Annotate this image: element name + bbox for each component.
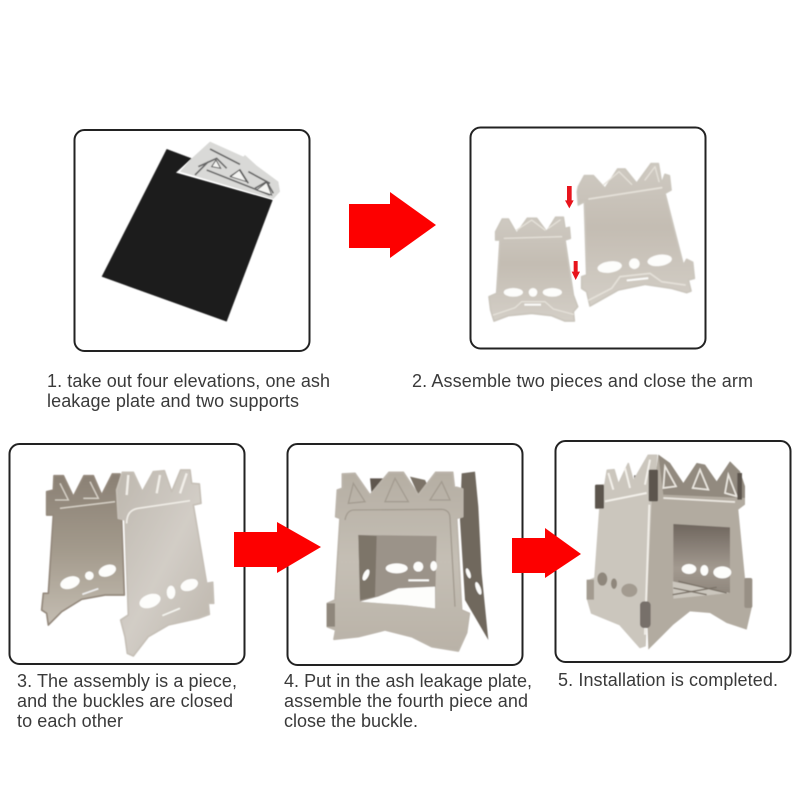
window with grate — [673, 524, 731, 599]
panel: step 5 — [556, 441, 790, 662]
embossed lines — [345, 478, 455, 607]
panel: step 1 — [74, 130, 310, 351]
hinge — [327, 603, 335, 627]
caption: step 4: assemble the fourth piece and — [284, 691, 528, 711]
left face — [587, 455, 657, 647]
arrow: step 4 to 5 — [512, 528, 581, 578]
caption: step 4: close the buckle. — [284, 711, 418, 731]
panel frame 5 — [556, 441, 790, 662]
caption: step 4: 4. Put in the ash leakage plate, — [284, 671, 532, 691]
red down arrow upper — [565, 186, 574, 208]
front frame plate — [327, 472, 469, 651]
caption: step 2: 2. Assemble two pieces and close the arm — [412, 371, 753, 391]
photo: partly assembled stove — [327, 472, 488, 651]
caption: step 4 — [284, 671, 532, 731]
arrow: step 1 to 2 — [349, 192, 436, 258]
caption: step 1: 1. take out four elevations, one ash — [47, 371, 330, 391]
caption: step 3: and the buckles are closed — [17, 691, 233, 711]
hinges — [587, 470, 752, 628]
large plate — [577, 164, 694, 306]
panel: step 4 — [288, 444, 522, 665]
front plate — [117, 470, 214, 656]
photo: black bag with plates — [102, 142, 280, 322]
back plate — [42, 474, 124, 625]
panel frame 2 — [470, 128, 706, 348]
red down arrow lower — [572, 261, 580, 280]
photo: two plates with arrows — [489, 164, 694, 321]
small plate — [489, 217, 578, 321]
panel frame 1 — [74, 130, 310, 351]
black bag — [102, 149, 273, 322]
caption: step 1: leakage plate and two supports — [47, 391, 299, 411]
caption: step 3: 3. The assembly is a piece, — [17, 671, 237, 691]
metal plates in bag — [180, 142, 280, 199]
photo: completed stove — [587, 455, 752, 650]
panel: step 3 — [10, 444, 244, 664]
photo: two plates joined — [42, 470, 214, 656]
caption: step 1 — [47, 371, 330, 411]
panel frame 3 — [10, 444, 244, 664]
dark back pieces — [370, 472, 488, 640]
right face — [645, 455, 752, 650]
caption: step 3 — [17, 671, 237, 731]
panel: step 2 — [470, 128, 706, 348]
caption: step 3: to each other — [17, 711, 123, 731]
panel frame 4 — [288, 444, 522, 665]
inner metal peek — [634, 475, 641, 484]
window — [358, 535, 437, 608]
caption: step 5: 5. Installation is completed. — [558, 670, 778, 690]
arrow: step 3 to 4 — [234, 522, 321, 573]
